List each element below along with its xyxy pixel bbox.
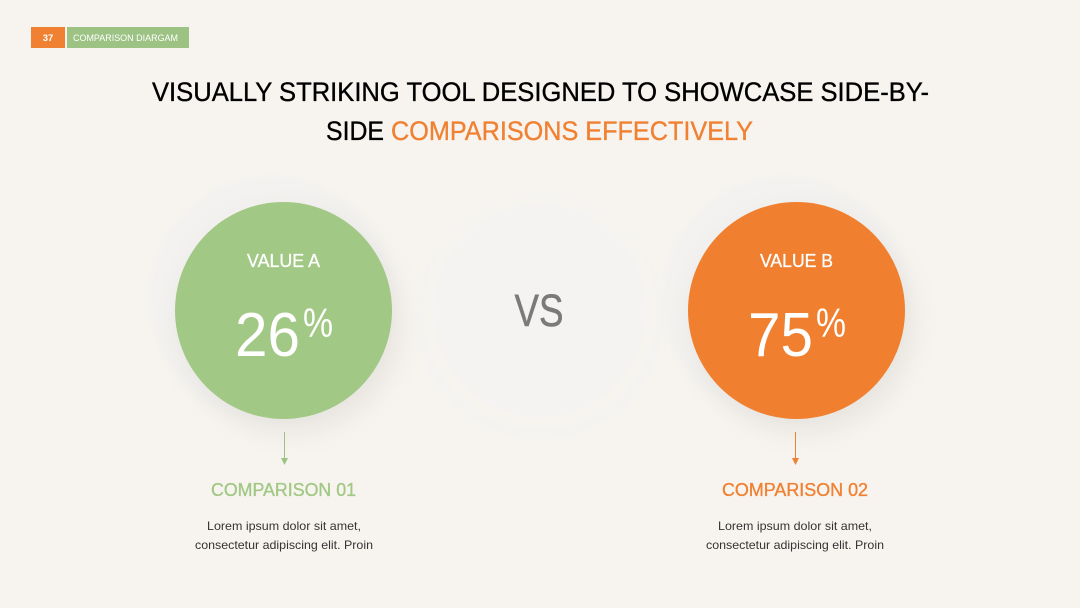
value A percentage: 26 [235,301,300,370]
title [152,77,929,146]
panel: value A circle: % [303,300,333,346]
section label tag [67,27,189,48]
panel: value B circle: % [816,300,846,346]
panel: VS circle [416,192,664,440]
heading: comparison 01: COMPARISON 01 [211,480,356,500]
title: VISUALLY STRIKING TOOL DESIGNED TO SHOWCASE SIDE-BY- [152,77,929,107]
VS label: VS [514,285,564,336]
page number tag: 37 [43,33,53,44]
panel: value A circle [150,176,400,432]
text block: comparison 01: consectetur adipiscing elit. Proin [195,538,373,552]
text block: comparison 01: Lorem ipsum dolor sit amet, [207,519,361,533]
value B label: VALUE B [760,251,833,271]
title: COMPARISONS EFFECTIVELY [391,116,753,146]
arrow: value A [281,432,288,465]
heading: comparison 02: COMPARISON 02 [722,480,868,500]
page number tag [31,27,65,48]
panel: value B circle [663,176,913,432]
text block: comparison 02: Lorem ipsum dolor sit amet, [718,519,872,533]
section label tag: COMPARISON DIARGAM [73,33,178,43]
value B percentage: 75 [748,301,813,370]
value A label: VALUE A [247,251,320,271]
text block: comparison 01 [195,519,373,552]
text block: comparison 02 [706,519,884,552]
title: SIDE [326,116,384,146]
arrow: value B [792,432,799,465]
text block: comparison 02: consectetur adipiscing elit. Proin [706,538,884,552]
